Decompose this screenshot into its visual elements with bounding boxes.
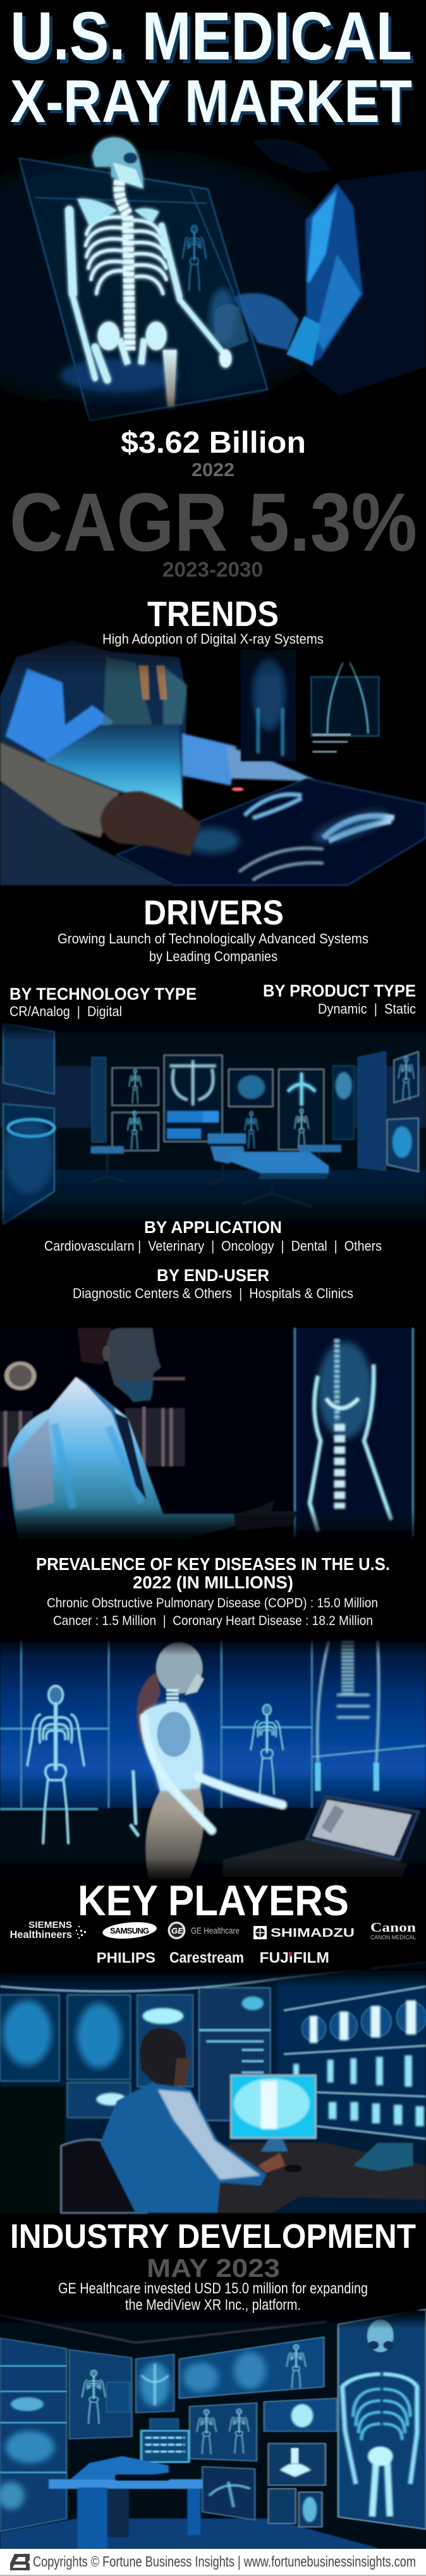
hero image: doctor with x-ray skeleton panel	[0, 137, 426, 443]
industry development text: the MediView XR Inc., platform.	[125, 2297, 301, 2314]
logo: Canon Medical: CANON MEDICAL	[370, 1934, 416, 1941]
industry development image: room with x-ray wall panels	[0, 2309, 426, 2549]
segment: by product type: BY PRODUCT TYPE	[263, 981, 416, 1000]
segment: by application: Cardiovascularn | Veterinary | Oncology | Dental | Others	[44, 1238, 382, 1254]
left wall panels	[3, 1024, 106, 1224]
logo: Canon Medical: Canon	[370, 1920, 416, 1935]
trends text	[102, 594, 324, 647]
right wall panels	[333, 1052, 418, 1172]
key players section	[0, 1877, 426, 1969]
key players heading: KEY PLAYERS	[78, 1877, 349, 1925]
logo: Siemens Healthineers: Healthineers	[10, 1929, 72, 1941]
logo: Shimadzu	[253, 1926, 355, 1940]
left panels	[0, 2338, 174, 2532]
segment: by product type	[263, 981, 416, 1017]
drivers image: x-ray room with beds and wall panels	[0, 1018, 426, 1244]
segment: by end-user	[73, 1266, 353, 1301]
trends text: TRENDS	[147, 594, 279, 634]
segment: by technology type: BY TECHNOLOGY TYPE	[9, 984, 197, 1003]
trends text: High Adoption of Digital X-ray Systems	[102, 631, 324, 647]
market size stat: 2022	[192, 460, 234, 481]
desk and monitor	[49, 2419, 202, 2549]
drivers text: Growing Launch of Technologically Advanced Systems	[58, 931, 368, 947]
drivers text	[58, 893, 368, 964]
doctor viewing x-ray image	[0, 1328, 426, 1545]
market size stat: $3.62 Billion	[121, 426, 306, 460]
disease prevalence text: PREVALENCE OF KEY DISEASES IN THE U.S.	[36, 1554, 390, 1574]
segment: by application	[44, 1218, 382, 1254]
logo: Philips: PHILIPS	[97, 1949, 155, 1966]
key players image: control room with monitors	[0, 1963, 426, 2213]
segment: by end-user: BY END-USER	[157, 1266, 269, 1285]
logo: GE Healthcare	[168, 1922, 240, 1939]
exam beds and chairs	[91, 1134, 341, 1207]
large skeleton panel	[338, 2309, 426, 2529]
drivers text: DRIVERS	[143, 893, 284, 932]
segment: by end-user: Diagnostic Centers & Others | Hospitals & Clinics	[73, 1285, 353, 1301]
industry development text	[10, 2217, 416, 2314]
segment: by technology type	[9, 984, 197, 1019]
logo: Siemens Healthineers: SIEMENS	[28, 1920, 72, 1930]
footer bar	[0, 2549, 426, 2576]
industry development text: GE Healthcare invested USD 15.0 million for expanding	[58, 2280, 368, 2297]
logo: GE Healthcare: GE Healthcare	[191, 1925, 240, 1935]
logo: Fujifilm: FUJIFILM	[259, 1949, 329, 1966]
logo: Samsung: SAMSUNG	[110, 1926, 149, 1935]
disease prevalence text: Chronic Obstructive Pulmonary Disease (COPD) : 15.0 Million	[47, 1596, 378, 1610]
logo: Siemens Healthineers	[10, 1920, 86, 1941]
CAGR stat: 2023-2030	[162, 558, 263, 581]
disease prevalence text	[36, 1554, 390, 1628]
trends image: doctor using tablet	[0, 623, 426, 885]
logo: Samsung	[102, 1920, 157, 1941]
logo: Carestream: Carestream	[169, 1949, 244, 1966]
market size stat	[121, 426, 306, 481]
segment: by technology type: CR/Analog | Digital	[9, 1003, 122, 1019]
icon: Fortune Business Insights logo	[10, 2554, 30, 2570]
logo: Shimadzu: SHIMADZU	[271, 1927, 355, 1940]
segment: by product type: Dynamic | Static	[318, 1001, 416, 1017]
center wall panels	[113, 1055, 324, 1151]
x-ray figure scene with holographic woman	[0, 1636, 426, 1884]
disease prevalence text: Cancer : 1.5 Million | Coronary Heart Disease : 18.2 Million	[53, 1614, 373, 1628]
industry development text: MAY 2023	[147, 2254, 280, 2283]
drivers text: by Leading Companies	[149, 948, 277, 964]
title	[10, 0, 415, 138]
logo: GE Healthcare: GE	[171, 1926, 183, 1935]
logo: Canon Medical	[370, 1920, 416, 1941]
center panels	[180, 2337, 337, 2527]
disease prevalence text: 2022 (IN MILLIONS)	[133, 1573, 293, 1592]
segment: by application: BY APPLICATION	[144, 1218, 282, 1237]
